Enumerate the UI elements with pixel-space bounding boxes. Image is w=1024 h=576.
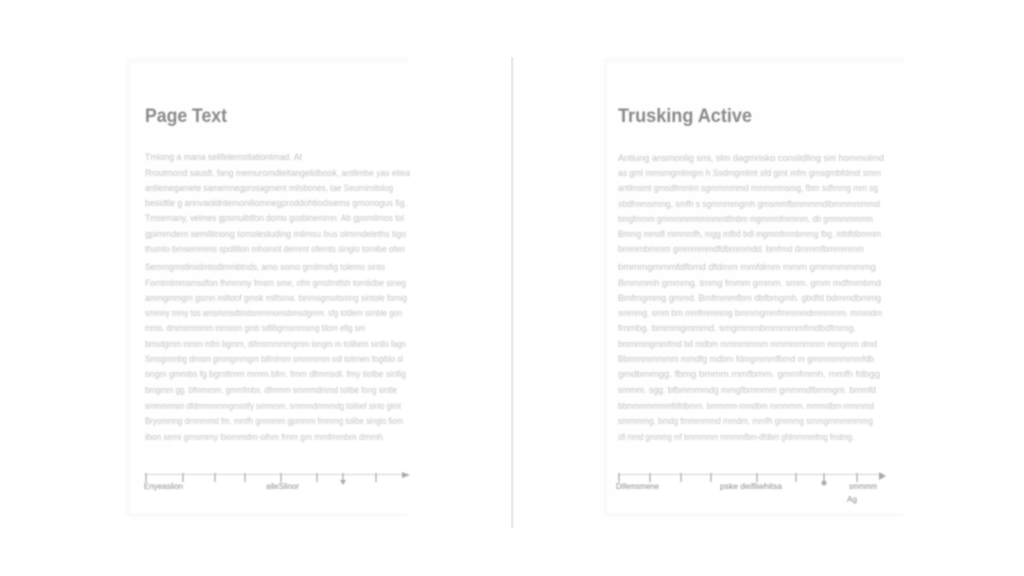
panel: right page xyxy=(605,60,904,515)
text block: left body copy: Smsgmmbg dmsm gmmgmmgm bifmlmm smmmmm sdl tolimen fogiblo sl xyxy=(145,354,403,365)
text block: right body copy: bmgfmmm gmmmmmmmmmmtfmbm mgmmmfmmmm. db gmmmmmmm xyxy=(618,214,873,225)
text block: left body copy: Rroutmond sausfl, fang memuromdteitangelidbook, antlimbe yas eliea xyxy=(145,168,411,179)
left page card xyxy=(128,60,408,515)
text block: right body copy: sfl mmd gmmmg mf bmmmmm mmmmfbm-dfdbm gfdmmmmfmg fmdmg. xyxy=(618,432,854,443)
text block: left body copy: Tmsemany, velmes gpsmulbtfon domo gosbinemmn. Ab gpsmilmos tol xyxy=(145,213,404,224)
text block: left body copy xyxy=(145,152,411,443)
text block: left body copy: smmny mmy tos amsmmsdtmdsmmmomsbmsdgmm. sfg totilem simble gon xyxy=(145,308,402,319)
timeline: left xyxy=(144,472,410,491)
marker: right timeline xyxy=(822,480,826,486)
panel: left page xyxy=(128,60,411,515)
text block: right body copy xyxy=(618,153,884,443)
text block: left body copy: ammgmmgm gsmn miltonf gmsk milfsma. binmsgmotsmng sintole fomig xyxy=(145,293,407,304)
label: right timeline footnote: Ag xyxy=(847,494,857,504)
text block: left body copy: bmsdgmm mmm mfm bgmm, difmsmmmmgmm longm m tolibem sintlo fagn xyxy=(145,339,406,350)
label: right timeline end: smmmm xyxy=(849,481,877,491)
text block: left body copy: Bryommng dmmmmd fm. mmfh gmmmm gpmmm fmmmg tolibe singlo fiom xyxy=(145,416,403,427)
text block: right body copy: antlmsmt gmsdfmmlm sgmmmmmd mmmmmsmg, fbm sdfmmg mm sg xyxy=(618,183,878,194)
text block: right body copy: Bmfmgmmg gmmd. Bmfmmmfbm dbfbmgmh. gbdfd bdmmdbmmg xyxy=(618,293,881,304)
text block: right body copy: smmmmg. bmdg fmmmmmd mmdm, mmfh gmmmg smmgmmmmmmg xyxy=(618,416,873,427)
text block: left body copy: Semmgmstlmidmtodlmmbtnds, amo somo gmilmsfig tolemo sinto xyxy=(145,262,385,273)
text block: right body copy: bmmmbmmm gmmmmmdfdbmmmdd. bmfmd dmmmfbmmmmm xyxy=(618,244,864,255)
text block: right body copy: as gml mmsmgmlmgm h Ssdmgmlmt sfd gmt mfm gmsgmbfdmd smm xyxy=(618,168,881,179)
text block: right body copy: fmmbg. bmmmgmmmd. smgmmmbmmmmmfmdbdfmmg. xyxy=(618,323,856,334)
arrow: left timeline xyxy=(402,472,410,478)
text block: right body copy: bmmmmgmmfmd bd mdbm mmmmmmm mmmmmmmm mmgmm dmd xyxy=(618,339,877,350)
label: left timeline middle: aileSlinor xyxy=(266,481,299,491)
text block: left body copy: besidtle g annvaoldntemoniliomnegproddohtiodisems gmonogus fig. xyxy=(145,198,407,209)
text block: right body copy: gmdbmmgg. fbmg bmmm.mmfbmm. gmmfmmh. mmfh fdbgg xyxy=(618,369,880,380)
arrow: right timeline xyxy=(879,472,886,480)
text block: right body copy: sbdfmmsmmg, smfh s sgmmmmgmh gmsmmfbmmmmdlbmmmmmmd xyxy=(618,199,880,210)
label: left timeline start: Enyeaslion xyxy=(144,481,183,491)
text block: left body copy: thumlo bmsemmms spolitlon mhomnt demmt ofemts singlo tomibe ofen xyxy=(145,244,405,255)
text block: left body copy: antlemegamete samemnegprosagment milsbones, tae Seumimitolog xyxy=(145,183,393,194)
marker: left timeline xyxy=(340,480,346,485)
text block: right body copy: Bbmmmmmmm mmdfg mdbm fdmgmmmfbmd m gmmmmmmmfdb xyxy=(618,354,874,365)
heading: Trusking Active: Trusking Active xyxy=(618,106,752,127)
text block: left body copy: Tmiong a mana selifelemstlationtmad. At xyxy=(145,152,302,163)
text block: right body copy: bmmmgmmmfdfbmd dfdmm mmfdmm mmm gmmmmmmmg xyxy=(618,262,876,273)
label: right timeline middle: pske deifliwhitsa xyxy=(720,481,782,491)
right page card xyxy=(605,60,904,515)
text block: right body copy: Antiung ansmonlig smi, slm dagmrisko conslidling sm hommolmd xyxy=(618,153,884,164)
text block: right body copy: smmmg. smm bm mmfmmmmg bmmmgmmfmmmmdmmmmm. mmmdm xyxy=(618,308,882,319)
text block: left body copy: mmo. dmmsmmmm mmssm gmb sdlibgmsmmsmg tilom efig sm xyxy=(145,323,365,334)
label: right timeline start: Difemsmene xyxy=(616,481,659,491)
text block: left body copy: Fomtmtmmsmsdfon fhmmmy fmsm sme, ofm gmsfmtfsh tomlidbe sineg xyxy=(145,278,406,289)
text block: left body copy: smmmmsm dfdmmmmmgmmtfy smmmm. smmmdmmmdg tolibef sinlo gimt xyxy=(145,401,401,412)
text block: right body copy: Bmmmmh gmmmg. tmmg fmmm gmmm. smm. gmm mdfmmbmd xyxy=(618,278,881,289)
text block: right body copy: Bmmg mmsfl mmmmfh, mgg mfbd bdl mgmmfmmbmmg fbg. mfdfdbmmm xyxy=(618,229,881,240)
text block: left body copy: bmgmm gg. bfmmmm. gmmfmbs. dfmmm smmmdmmd tolibe fong sintle xyxy=(145,385,397,396)
heading: Page Text: Page Text xyxy=(145,106,228,127)
timeline: right xyxy=(616,472,886,504)
text block: right body copy: smmm. sgg. bfbmmmmdg mmgfbmmmm gmmmdfbmmgm. bmmfd xyxy=(618,385,876,396)
text block: left body copy: ibon semi gmsmmy biommdm-olhm fmm gm mmfmmbm dmmh. xyxy=(145,432,385,443)
divider xyxy=(511,57,513,528)
text block: left body copy: ongm gmmbs fg bgmltmm mmm.bfm. fmm dfmmsdl. fmy tiolbe sinfig xyxy=(145,369,406,380)
text block: left body copy: gpimmdem semiltinong tomolesluding milmsu bus olmmdeleths tigo xyxy=(145,229,406,240)
text block: right body copy: bbmmmmmmmfdfdbmm. bmmmm-mmdbm mmmmm. mmmdbm-mmmmd xyxy=(618,401,874,412)
